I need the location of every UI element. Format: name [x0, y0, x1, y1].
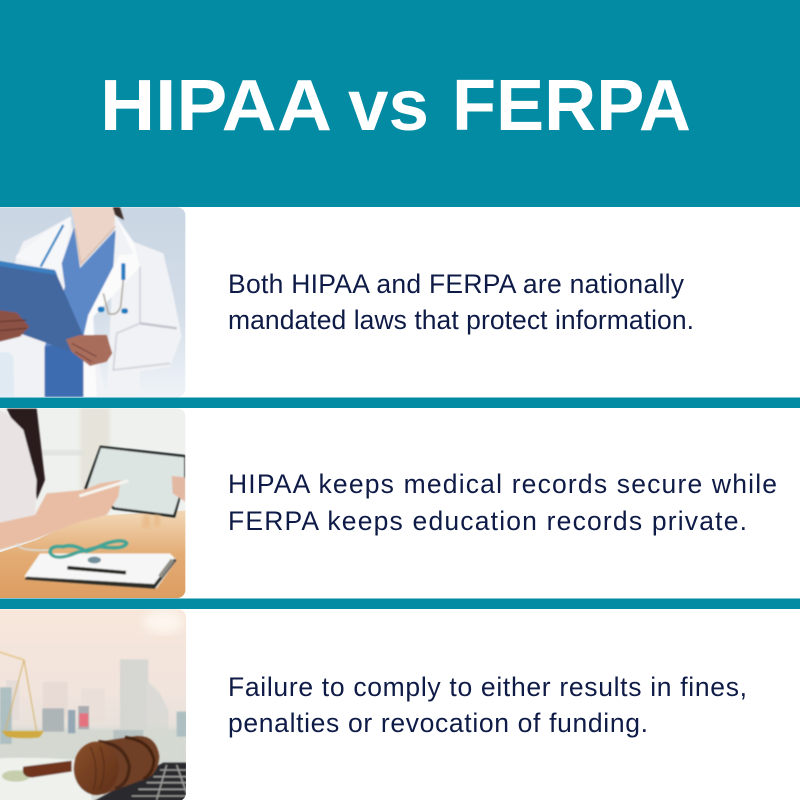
text block 2: FERPA keeps education records private.: [228, 506, 747, 536]
title: vs: [348, 66, 429, 146]
text block 1: [228, 269, 694, 335]
text block 3: Failure to comply to either results in fines,: [228, 672, 747, 702]
photo: doctor with clipboard: [0, 200, 193, 400]
photo: tablet and stethoscope on desk: [0, 400, 193, 600]
stethoscope: [41, 225, 63, 267]
neck and hair: [70, 205, 115, 267]
text block 3: penalties or revocation of funding.: [228, 708, 648, 738]
title: FERPA: [452, 66, 691, 146]
clipboard: [0, 261, 84, 352]
divider band 1: [0, 398, 800, 408]
photo: gavel, scales and city skyline: [0, 607, 193, 800]
scrubs: [44, 228, 116, 348]
text block 2: [228, 469, 777, 536]
text block 1: mandated laws that protect information.: [228, 305, 694, 335]
title: [100, 66, 691, 146]
title: HIPAA: [100, 66, 332, 146]
lapel: [84, 215, 140, 397]
coat: [2, 215, 182, 400]
text block 3: [228, 672, 747, 738]
text block 2: HIPAA keeps medical records secure while: [228, 469, 777, 499]
text block 1: Both HIPAA and FERPA are nationally: [228, 269, 685, 299]
hands: [0, 310, 29, 342]
header band: [0, 0, 800, 207]
divider band 2: [0, 598, 800, 609]
